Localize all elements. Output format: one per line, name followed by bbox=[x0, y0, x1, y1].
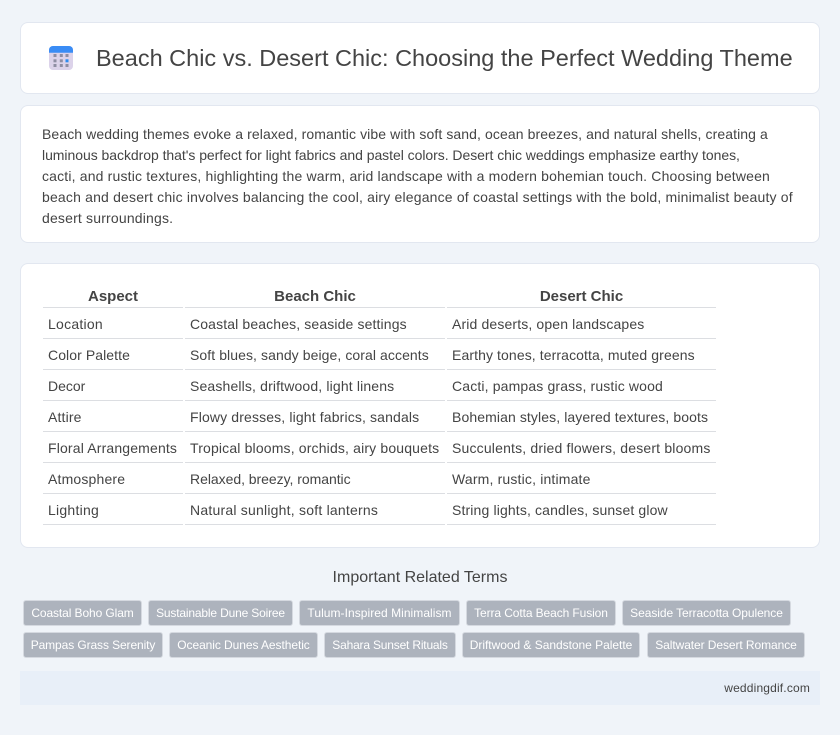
panel: comparison table bbox=[20, 263, 820, 548]
comparison table: Bohemian styles, layered textures, boots bbox=[452, 409, 708, 425]
comparison table: Color Palette bbox=[48, 347, 130, 363]
title: Beach Chic vs. Desert Chic: Choosing the Perfect Wedding Theme bbox=[96, 45, 793, 71]
comparison table: Flowy dresses, light fabrics, sandals bbox=[190, 409, 419, 425]
comparison table: Warm, rustic, intimate bbox=[452, 471, 591, 487]
comparison table: Atmosphere bbox=[48, 471, 125, 487]
comparison table: Arid deserts, open landscapes bbox=[452, 316, 644, 332]
footer source: weddingdif.com bbox=[724, 681, 810, 695]
comparison table: Beach Chic bbox=[274, 288, 356, 305]
heading: related terms: Important Related Terms bbox=[333, 569, 507, 586]
footer bar bbox=[20, 671, 820, 705]
comparison table: Desert Chic bbox=[540, 288, 623, 305]
intro text: Beach wedding themes evoke a relaxed, romantic vibe with soft sand, ocean breezes, and natural shells, creating a bbox=[42, 126, 768, 142]
related term tags: Tulum-Inspired Minimalism bbox=[307, 606, 452, 620]
intro text bbox=[42, 126, 793, 226]
comparison table: Natural sunlight, soft lanterns bbox=[190, 502, 378, 518]
comparison table: Seashells, driftwood, light linens bbox=[190, 378, 394, 394]
comparison table: Succulents, dried flowers, desert blooms bbox=[452, 440, 711, 456]
related term tags: Driftwood & Sandstone Palette bbox=[470, 638, 632, 652]
related term tags: Oceanic Dunes Aesthetic bbox=[177, 638, 310, 652]
comparison table: Soft blues, sandy beige, coral accents bbox=[190, 347, 429, 363]
related term tags: Sustainable Dune Soiree bbox=[156, 606, 285, 620]
comparison table: Tropical blooms, orchids, airy bouquets bbox=[190, 440, 439, 456]
header card bbox=[20, 22, 820, 94]
related term tags bbox=[23, 600, 805, 658]
related term tags: Terra Cotta Beach Fusion bbox=[474, 606, 608, 620]
related term tags: Seaside Terracotta Opulence bbox=[630, 606, 783, 620]
comparison table: Decor bbox=[48, 378, 85, 394]
intro text: luminous backdrop that's perfect for light fabrics and pastel colors. Desert chic weddings emphasize earthy tones, bbox=[42, 147, 740, 163]
related term tags: Sahara Sunset Rituals bbox=[332, 638, 448, 652]
related term tags: Pampas Grass Serenity bbox=[31, 638, 155, 652]
icon: calendar bbox=[49, 46, 73, 70]
comparison table: Location bbox=[48, 316, 103, 332]
comparison table bbox=[43, 288, 716, 525]
intro text: cacti, and rustic textures, highlighting the warm, arid landscape with a modern bohemian touch. Choosing between bbox=[42, 168, 770, 184]
panel: introduction bbox=[20, 105, 820, 243]
comparison table: Attire bbox=[48, 409, 82, 425]
comparison table: String lights, candles, sunset glow bbox=[452, 502, 668, 518]
comparison table: Earthy tones, terracotta, muted greens bbox=[452, 347, 695, 363]
comparison table: Aspect bbox=[88, 288, 138, 305]
intro text: desert surroundings. bbox=[42, 210, 173, 226]
comparison table: Coastal beaches, seaside settings bbox=[190, 316, 407, 332]
comparison table: Cacti, pampas grass, rustic wood bbox=[452, 378, 663, 394]
related term tags: Saltwater Desert Romance bbox=[655, 638, 797, 652]
comparison table: Floral Arrangements bbox=[48, 440, 177, 456]
related term tags: Coastal Boho Glam bbox=[31, 606, 134, 620]
comparison table: Relaxed, breezy, romantic bbox=[190, 471, 351, 487]
comparison table: Lighting bbox=[48, 502, 99, 518]
intro text: beach and desert chic involves balancing the cool, airy elegance of coastal settings with the bold, minimalist beauty of bbox=[42, 189, 793, 205]
